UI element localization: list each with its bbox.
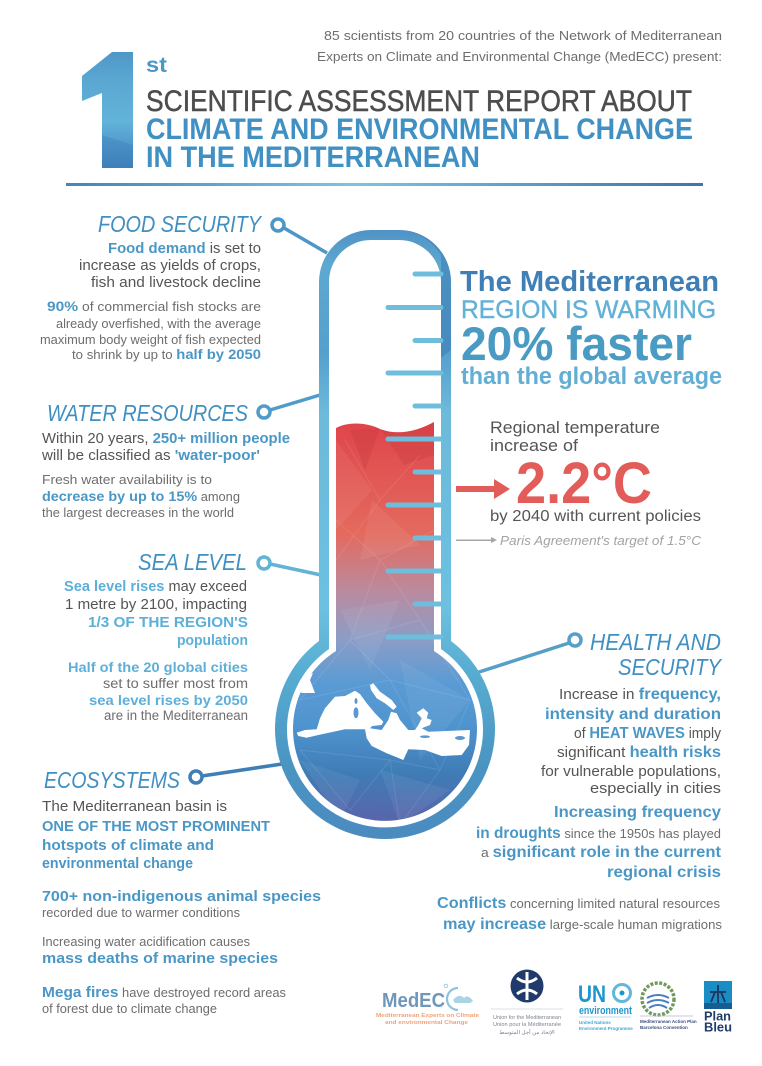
acidification text: Increasing water acidification causes xyxy=(42,935,250,949)
mercury fill xyxy=(290,418,480,826)
droughts text: regional crisis xyxy=(607,864,721,881)
heading: FOOD SECURITY xyxy=(98,211,262,237)
food demand text: increase as yields of crops, xyxy=(79,258,261,274)
logo: Union for the Mediterranean xyxy=(491,970,563,1036)
mega fires text: of forest due to climate change xyxy=(42,1002,217,1016)
mega fires text: Mega fires have destroyed record areas xyxy=(42,984,286,1001)
fresh water text: decrease by up to 15% among xyxy=(42,488,240,504)
fresh water text xyxy=(42,473,240,520)
title line 2: CLIMATE AND ENVIRONMENTAL CHANGE xyxy=(146,113,693,146)
fish stocks text xyxy=(40,298,261,362)
panel: warming headline: than the global average xyxy=(461,363,722,390)
food demand text: Food demand is set to xyxy=(108,241,261,257)
food demand text: fish and livestock decline xyxy=(91,275,261,291)
heat waves text: Increase in frequency, xyxy=(559,686,721,703)
logo: UN environment: United Nations xyxy=(579,1020,611,1025)
value 2.2°C: 2.2°C xyxy=(516,451,652,516)
label above xyxy=(490,418,660,455)
logo: Mediterranean Action Plan: Mediterranean Action Plan xyxy=(640,1019,697,1024)
mega fires text xyxy=(42,984,286,1016)
panel: warming headline: 20% faster xyxy=(461,317,692,370)
glass outline xyxy=(275,230,495,839)
fish stocks text: to shrink by up to half by 2050 xyxy=(72,346,261,362)
logo: MedECC: and environmental Change xyxy=(385,1020,468,1026)
fish stocks text: already overfished, with the average xyxy=(56,317,261,331)
logo: Mediterranean Action Plan xyxy=(640,983,697,1030)
heat waves text: significant health risks xyxy=(557,744,721,761)
panel: temperature increase xyxy=(456,418,702,548)
panel: warming headline: The Mediterranean xyxy=(460,266,719,298)
heading xyxy=(590,629,722,680)
hotspots text xyxy=(42,799,270,872)
logo: UN environment: Environment Programme xyxy=(579,1026,633,1031)
conflicts text: Conflicts concerning limited natural resources xyxy=(437,895,720,912)
logo: Union for the Mediterranean: Union for the Mediterranean xyxy=(493,1015,561,1021)
logo: Union for the Mediterranean: الإتحاد من أجل المتوسط xyxy=(499,1027,555,1036)
heading: WATER RESOURCES xyxy=(47,400,249,426)
logo: Plan Bleu: Plan xyxy=(704,1008,731,1024)
droughts text xyxy=(476,804,721,881)
logos xyxy=(376,970,732,1036)
fish stocks text: 90% of commercial fish stocks are xyxy=(47,298,261,314)
droughts text: a significant role in the current xyxy=(481,844,721,861)
intro text: 85 scientists from 20 countries of the Network of Mediterranean xyxy=(324,29,722,43)
heading: ECOSYSTEMS xyxy=(44,767,181,793)
hotspots text: The Mediterranean basin is xyxy=(42,799,227,815)
title line 1: SCIENTIFIC ASSESSMENT REPORT ABOUT xyxy=(146,85,692,118)
fresh water text: Fresh water availability is to xyxy=(42,473,212,487)
heading: SEA LEVEL xyxy=(138,549,247,575)
panel: health and security xyxy=(437,629,722,933)
connector: health and security xyxy=(476,634,581,673)
logo: UN environment: environment xyxy=(579,1005,632,1017)
sea level rises text: population xyxy=(177,633,248,649)
sea level rises text: 1 metre by 2100, impacting xyxy=(65,597,247,613)
logo: MedECC xyxy=(376,984,479,1026)
label above: increase of xyxy=(490,436,578,455)
panel: warming headline: REGION IS WARMING xyxy=(461,296,716,324)
big numeral 1 xyxy=(82,52,167,168)
connector: water resources xyxy=(258,395,320,418)
arrow: grey xyxy=(456,537,497,543)
thermometer xyxy=(190,219,581,839)
title line 3: IN THE MEDITERRANEAN xyxy=(146,141,480,174)
arrow: red xyxy=(456,479,510,499)
title xyxy=(82,52,693,174)
hotspots text: environmental change xyxy=(42,856,193,872)
global cities text: are in the Mediterranean xyxy=(104,708,248,723)
non-indigenous species text: recorded due to warmer conditions xyxy=(42,906,240,920)
logo: UN environment: UN xyxy=(578,981,606,1008)
global cities text: Half of the 20 global cities xyxy=(68,660,248,675)
logo: Mediterranean Action Plan: Barcelona Convention xyxy=(640,1025,688,1030)
logo: Union for the Mediterranean: Union pour la Méditerranée xyxy=(493,1022,561,1028)
acidification text xyxy=(42,935,278,967)
scale ticks xyxy=(388,274,441,637)
global cities text: set to suffer most from xyxy=(103,676,248,691)
map of the Mediterranean xyxy=(297,673,470,760)
panel: ecosystems xyxy=(42,767,321,1016)
global cities text: sea level rises by 2050 xyxy=(89,693,248,708)
label above: Regional temperature xyxy=(490,418,660,437)
connector: ecosystems xyxy=(190,764,282,783)
hotspots text: ONE OF THE MOST PROMINENT xyxy=(42,819,270,835)
non-indigenous species text: 700+ non-indigenous animal species xyxy=(42,888,321,905)
sea level rises text: 1/3 OF THE REGION'S xyxy=(88,615,248,631)
heat waves text xyxy=(541,686,722,797)
logo: Plan Bleu xyxy=(704,981,732,1034)
intro text xyxy=(317,29,722,64)
logo: Plan Bleu: Bleu xyxy=(704,1020,732,1034)
food demand text xyxy=(79,241,261,291)
heat waves text: for vulnerable populations, xyxy=(541,764,721,780)
intro text: Experts on Climate and Environmental Change (MedECC) present: xyxy=(317,50,722,64)
non-indigenous species text xyxy=(42,888,321,920)
panel: sea level xyxy=(64,549,248,723)
hotspots text: hotspots of climate and xyxy=(42,838,214,854)
connector: food security xyxy=(272,219,327,253)
logo: UN environment xyxy=(578,981,633,1031)
heading: SECURITY xyxy=(618,654,722,680)
water-poor text: will be classified as 'water-poor' xyxy=(41,448,260,464)
panel: water resources xyxy=(41,400,290,520)
logo: MedECC: MedEC xyxy=(382,990,445,1012)
global cities text xyxy=(68,660,248,723)
sea level rises text: Sea level rises may exceed xyxy=(64,579,247,595)
conflicts text xyxy=(437,895,722,933)
droughts text: in droughts since the 1950s has played xyxy=(476,825,721,842)
big numeral 1: st xyxy=(146,54,167,77)
panel: warming headline xyxy=(460,266,722,390)
panel: food security xyxy=(40,211,262,362)
heat waves text: especially in cities xyxy=(590,781,721,797)
Paris target: Paris Agreement's target of 1.5°C xyxy=(500,534,702,548)
logo: MedECC: Mediterranean Experts on Climate xyxy=(376,1013,479,1019)
heading: HEALTH AND xyxy=(590,629,721,655)
heat waves text: intensity and duration xyxy=(545,706,721,723)
fish stocks text: maximum body weight of fish expected xyxy=(40,333,261,347)
acidification text: mass deaths of marine species xyxy=(42,950,278,967)
droughts text: Increasing frequency xyxy=(554,804,721,821)
conflicts text: may increase large-scale human migrations xyxy=(443,916,722,933)
water-poor text: Within 20 years, 250+ million people xyxy=(42,431,290,447)
sea level rises text xyxy=(64,579,248,649)
heat waves text: of HEAT WAVES imply xyxy=(574,725,722,742)
water-poor text xyxy=(41,431,290,464)
label below: by 2040 with current policies xyxy=(490,508,701,525)
connector: sea level xyxy=(258,557,321,575)
fresh water text: the largest decreases in the world xyxy=(42,506,234,520)
